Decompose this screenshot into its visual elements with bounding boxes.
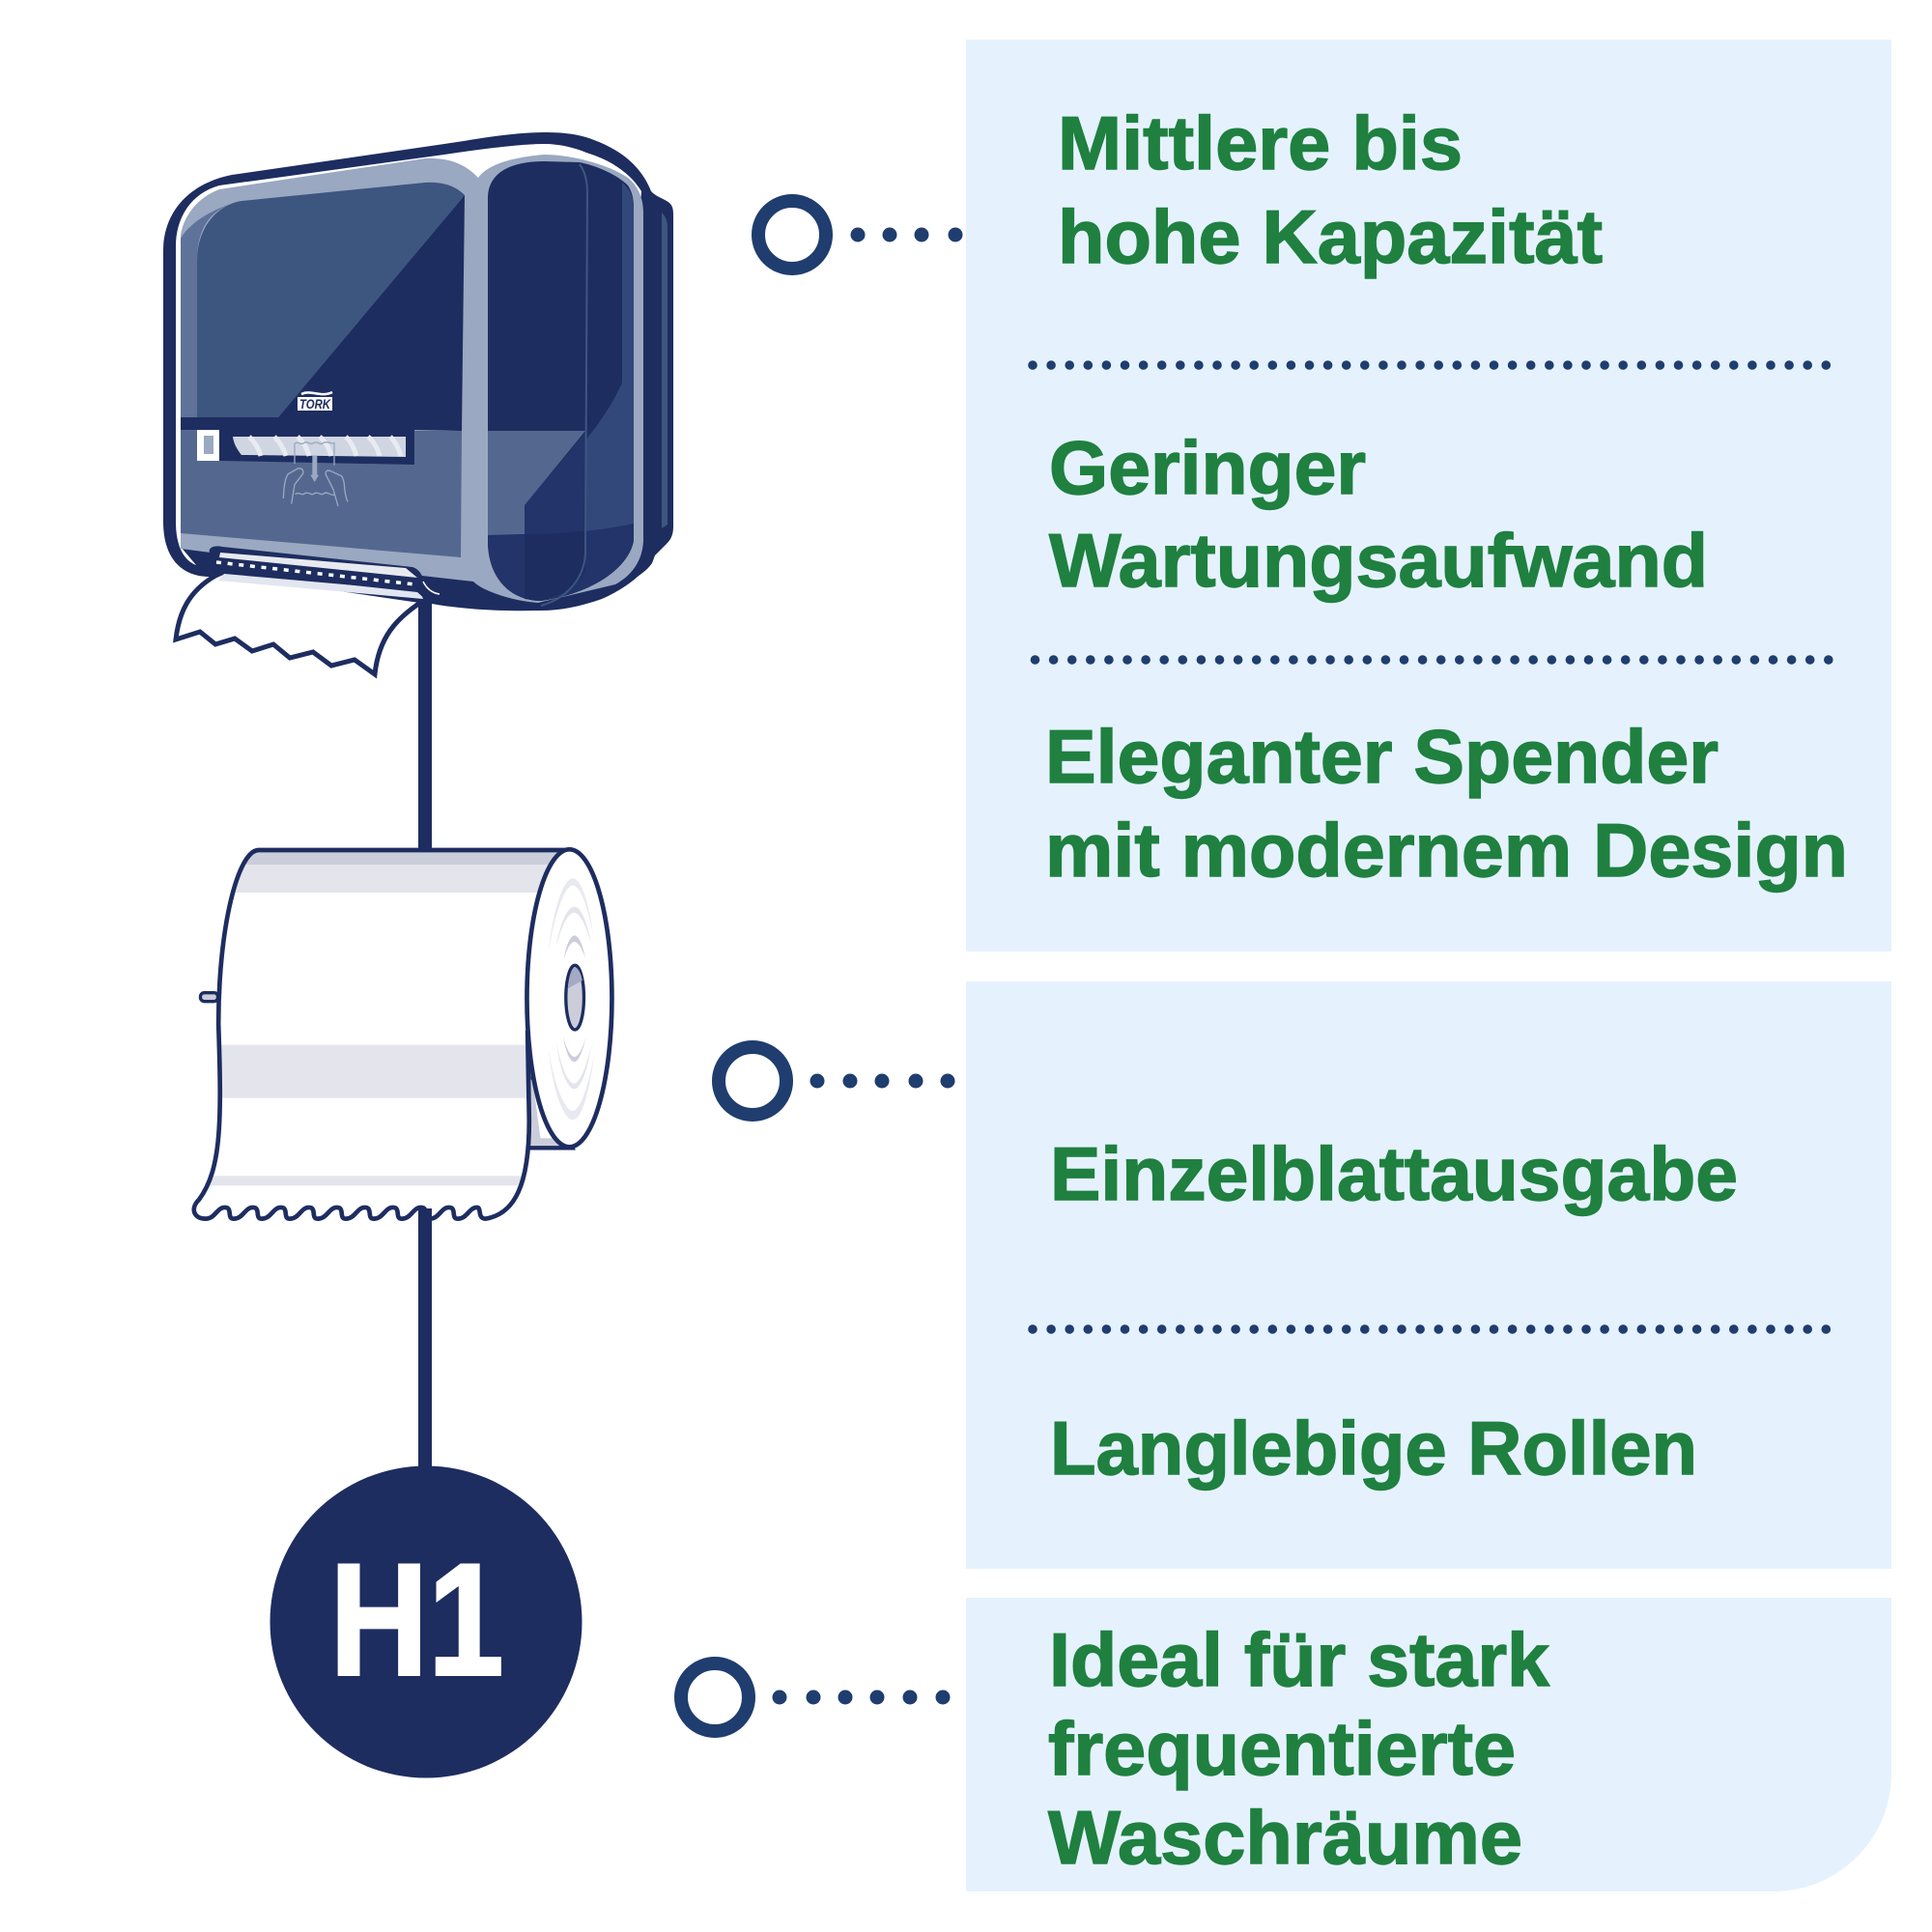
right window xyxy=(488,161,634,606)
lower panel xyxy=(181,430,462,557)
panel: capacity, maintenance, design xyxy=(966,40,1891,952)
badge: H1: H1 xyxy=(330,1530,504,1708)
dispenser outer shell xyxy=(163,132,673,611)
callout marker: roll xyxy=(719,1047,954,1115)
text: Eleganter Spender mit modernem Design: mit modernem Design xyxy=(1045,808,1848,893)
connector: line over roll edge xyxy=(418,1208,432,1228)
core hole xyxy=(566,965,583,1030)
indicator window xyxy=(197,430,219,461)
paper towel xyxy=(176,572,423,674)
towel slot xyxy=(233,437,406,457)
text: Mittlere bis hohe Kapazität: Mittlere bis xyxy=(1058,100,1463,185)
text: Geringer Wartungsaufwand: Wartungsaufwand xyxy=(1049,518,1708,603)
callout marker: dispenser xyxy=(758,201,962,269)
TORK logo xyxy=(298,392,332,412)
text: Ideal für stark frequentierte Waschräume: frequentierte xyxy=(1048,1706,1516,1791)
paper shading xyxy=(218,574,423,599)
white edge highlight xyxy=(176,144,641,565)
text: Mittlere bis hohe Kapazität: hohe Kapazität xyxy=(1058,194,1603,279)
dark diagonal and band xyxy=(181,195,465,465)
text: Eleganter Spender mit modernem Design: Eleganter Spender xyxy=(1045,714,1719,799)
roll body xyxy=(193,850,571,1219)
panel: single sheet, long-lasting rolls xyxy=(966,981,1891,1569)
icon: towel dispenser xyxy=(163,132,673,674)
icon: paper roll xyxy=(193,849,611,1219)
TORK logo: TORK xyxy=(299,396,331,412)
connector: vertical line xyxy=(418,599,432,1497)
panel: ideal for high traffic washrooms xyxy=(966,1598,1891,1891)
text: Einzelblattausgabe: Einzelblattausgabe xyxy=(1050,1131,1738,1216)
towel exit slot xyxy=(210,546,440,601)
roll end face xyxy=(526,849,611,1147)
text: Langlebige Rollen: Langlebige Rollen xyxy=(1050,1406,1697,1491)
steel frame xyxy=(181,155,643,603)
badge: H1 xyxy=(270,1466,582,1777)
axle peg xyxy=(200,993,217,1002)
text: Ideal für stark frequentierte Waschräume: Waschräume xyxy=(1048,1795,1522,1880)
left window glass xyxy=(197,183,465,417)
callout marker: H1 xyxy=(681,1663,951,1731)
side panel xyxy=(662,213,668,528)
text: Geringer Wartungsaufwand: Geringer xyxy=(1049,425,1366,510)
hands pictogram xyxy=(283,442,348,506)
left window strip xyxy=(181,201,242,417)
text: Ideal für stark frequentierte Waschräume: Ideal für stark xyxy=(1049,1617,1550,1702)
roll back section xyxy=(527,1075,573,1148)
white inner fold xyxy=(533,1085,552,1138)
